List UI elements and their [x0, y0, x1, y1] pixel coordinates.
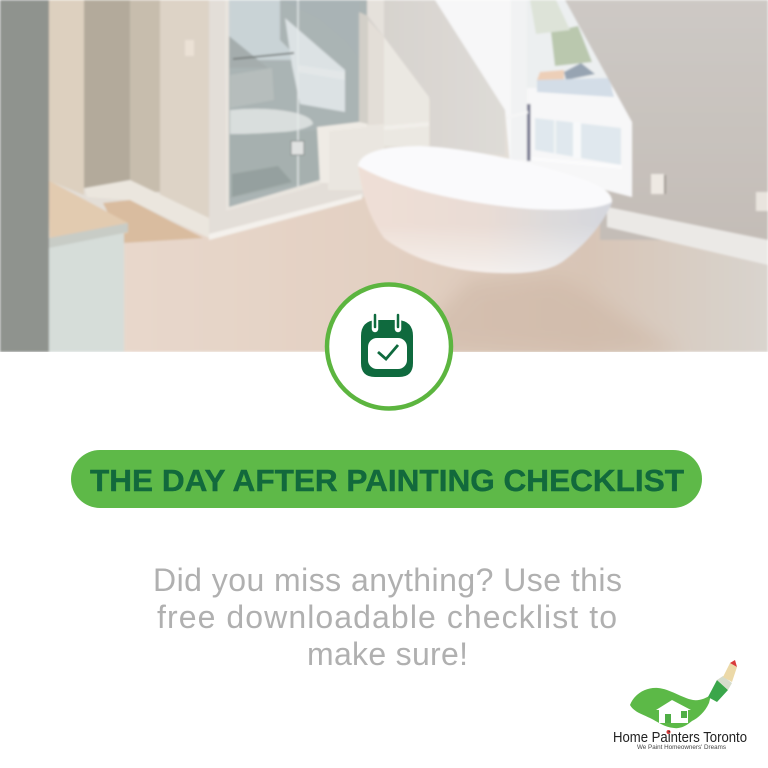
logo house [656, 700, 691, 723]
gray wall edge [0, 0, 49, 352]
back wall [56, 20, 510, 230]
heading text: THE DAY AFTER PAINTING CHECKLIST [90, 463, 684, 498]
window [435, 0, 632, 197]
intro paragraph: Did you miss anything? Use this [153, 562, 622, 598]
icon: calendar check [361, 315, 413, 377]
intro paragraph [153, 562, 622, 672]
bathtub rim [358, 146, 612, 210]
logo paint swoosh [630, 688, 711, 728]
vanity cabinet [49, 233, 124, 352]
heading pill [71, 450, 702, 508]
icon: calendar badge [327, 284, 451, 408]
sloped ceiling wall [369, 0, 450, 146]
shower surround [209, 0, 384, 238]
logo: Home Painters Toronto [613, 660, 747, 751]
floor [120, 197, 768, 352]
counter top [48, 180, 126, 238]
alcove baseboard [85, 180, 209, 238]
shower glass [226, 0, 367, 210]
left beige panel [47, 0, 84, 195]
right baseboard [607, 207, 768, 265]
alcove floor [103, 200, 203, 243]
logo tagline: We Paint Homeowners' Dreams [637, 744, 727, 751]
alcove walls [84, 0, 130, 188]
logo brush [708, 660, 737, 702]
floor shading right of centre [443, 281, 670, 352]
faucet [527, 104, 530, 161]
logo name: Home Painters Toronto [613, 730, 747, 746]
niche under slope [384, 37, 429, 146]
right wall [600, 190, 760, 240]
intro paragraph: make sure! [307, 636, 468, 672]
bathtub [358, 146, 612, 273]
logo maple leaf [666, 730, 670, 734]
intro paragraph: free downloadable checklist to [157, 599, 617, 635]
bathroom photo [0, 0, 768, 352]
right wall slope [566, 0, 610, 80]
outlets [651, 174, 664, 194]
light switch [185, 40, 194, 56]
